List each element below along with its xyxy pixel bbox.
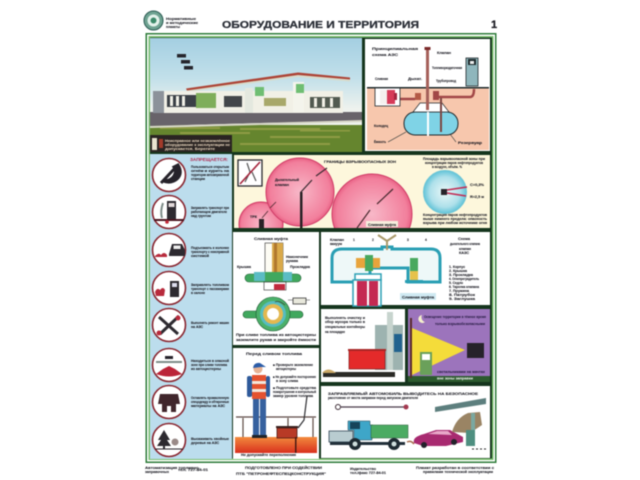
text: no explosive cargo bbox=[191, 359, 229, 371]
text: no oily clothes: Оставлять промасленную bbox=[191, 396, 229, 400]
worker heading: Перед сливом топлива bbox=[246, 351, 303, 356]
fence bbox=[236, 417, 316, 437]
zone labels: клапан bbox=[275, 183, 289, 187]
ground bbox=[367, 88, 489, 150]
valve labels: Клапан bbox=[330, 238, 344, 242]
panel: refuse container bbox=[321, 309, 405, 382]
vent pipe bbox=[426, 48, 429, 110]
text: no oily clothes: спецодежду и обтирочные bbox=[191, 400, 229, 404]
valve legend: 8. Патрубок bbox=[449, 293, 476, 297]
valve labels: 4 bbox=[425, 238, 427, 242]
text: no car washing bbox=[191, 246, 229, 258]
text: no fuel spill: над грунтом bbox=[191, 214, 212, 218]
diagram heading bbox=[372, 46, 419, 57]
tank labels: Топливораздаточная bbox=[432, 66, 462, 70]
inset heading: в воздухе, объём. % bbox=[432, 165, 462, 169]
lighting note: только взрывобезопасными bbox=[435, 322, 485, 326]
valve legend: 5. Седло bbox=[449, 281, 463, 285]
light beam bbox=[412, 328, 465, 375]
text: no oily clothes bbox=[191, 396, 229, 408]
footer left credit: Автоматизация топливно- bbox=[145, 466, 200, 470]
lighting note: Освещение территории в тёмное время bbox=[424, 315, 486, 319]
poster number: 1 bbox=[491, 19, 497, 31]
container note: на площадке bbox=[325, 330, 345, 334]
canopy bbox=[435, 398, 486, 446]
warning sign: оборудование к эксплуатации не bbox=[165, 143, 230, 147]
valve legend bbox=[449, 236, 480, 301]
canopy roof bbox=[186, 74, 350, 92]
ground bbox=[235, 437, 317, 453]
valve labels: 2 bbox=[372, 238, 374, 242]
valve labels bbox=[330, 238, 427, 246]
valve central stem bbox=[353, 255, 381, 306]
valve side stem bbox=[405, 258, 423, 283]
text: no explosive cargo: из автоцистерны bbox=[191, 367, 221, 371]
warning sign: допускается. Берегите bbox=[165, 147, 215, 151]
tank labels: Дыхат. bbox=[408, 77, 422, 81]
text: no repair: Выполнять ремонт машин bbox=[191, 321, 229, 325]
fill well bbox=[276, 396, 307, 453]
footer right credit: Издательство bbox=[350, 467, 376, 471]
coupling note bbox=[236, 333, 316, 342]
truck bbox=[329, 421, 408, 450]
lighting fixture bbox=[467, 343, 484, 358]
road bbox=[150, 112, 362, 126]
valve legend: 3. Прокладка bbox=[449, 273, 473, 277]
valve labels: вакуум bbox=[330, 242, 343, 246]
worker checklist: ■ Проверьте заземление bbox=[273, 363, 313, 367]
vehicles heading: расстояние от места заправки перед запуском двигателя bbox=[328, 396, 418, 400]
inset circle bbox=[424, 170, 485, 214]
text: no car washing: Подъезжать к колонке bbox=[191, 246, 229, 250]
tank labels: Трубопровод bbox=[436, 79, 456, 83]
tank labels bbox=[374, 51, 482, 145]
coupling top view bbox=[243, 297, 303, 331]
valve caption: Сливная муфта bbox=[402, 296, 434, 300]
footer left credit: заправочных bbox=[145, 470, 169, 474]
inset heading bbox=[423, 157, 485, 169]
header logo: плакаты bbox=[166, 25, 180, 29]
inset heading: Площадь взрывоопасной зоны при bbox=[423, 157, 485, 161]
valve legend: 6. Тарелка клапана bbox=[449, 285, 479, 289]
valve legend: 9. Заглушка bbox=[449, 297, 475, 301]
worker checklist: автоцистерны bbox=[276, 367, 296, 371]
footer right credit: тел./факс 727-84-01 bbox=[350, 471, 386, 475]
title: ОБОРУДОВАНИЕ И ТЕРРИТОРИЯ bbox=[222, 19, 419, 31]
panel: vehicles bbox=[321, 386, 490, 458]
lighting note: вне зоны заправки bbox=[437, 376, 473, 380]
text: no open fire: станции bbox=[191, 177, 205, 181]
coupling note: При сливе топлива из автоцистерны bbox=[236, 333, 316, 337]
inset note: Концентрация паров нефтепродуктов bbox=[423, 213, 487, 217]
ground strip bbox=[323, 372, 395, 377]
sports car bbox=[414, 430, 463, 448]
icon: no car washing bbox=[152, 234, 186, 266]
text: no open fire bbox=[191, 165, 230, 181]
container note: Выполнять очистку и bbox=[325, 316, 365, 320]
exhaust bbox=[407, 441, 414, 444]
icon: no oily clothes bbox=[152, 386, 186, 418]
valve legend: КАЗС bbox=[459, 251, 470, 255]
coupling heading: Сливная муфта bbox=[254, 236, 289, 241]
fuel vapour cloud bbox=[452, 412, 482, 433]
diagram heading: Принципиальная bbox=[372, 46, 419, 51]
text: no car washing: транспорту с неисправной bbox=[191, 250, 229, 254]
footer centre credit: ПТБ "ПЕТРОНЕФТЕСПЕЦКОНСТРУКЦИЯ" bbox=[236, 471, 326, 476]
zone labels: ТРК bbox=[250, 215, 257, 219]
worker checklist: ■ Не допускайте посторонних bbox=[273, 375, 316, 379]
red container bbox=[348, 349, 386, 369]
text: no trees on territory bbox=[191, 437, 229, 445]
footer right credit: правилами технической эксплуатации bbox=[423, 470, 493, 474]
zones heading: ГРАНИЦЫ ВЗРЫВООПАСНЫХ ЗОН bbox=[324, 159, 396, 164]
booth bbox=[375, 312, 403, 370]
coupling side view bbox=[245, 243, 301, 290]
panel: gas station photo bbox=[150, 38, 362, 152]
inset heading: концентрации паров нефтепродуктов bbox=[425, 161, 483, 165]
inset circle: R=2,5 м bbox=[470, 195, 485, 199]
header logo: и методические bbox=[166, 21, 198, 25]
text: no repair: на АЗС bbox=[191, 325, 204, 329]
worker checklist bbox=[273, 363, 316, 398]
zone labels: Дыхательный bbox=[275, 178, 299, 182]
footer right credit: Плакат разработан в соответствии с bbox=[416, 466, 494, 470]
distant field bbox=[150, 125, 362, 152]
tank labels: Ёмкость bbox=[374, 140, 386, 144]
text: no people near dispenser: транспорт с пассажирами bbox=[191, 287, 229, 291]
text: no explosive cargo: Находиться в опасной bbox=[191, 359, 229, 363]
icon: no trees on territory bbox=[152, 424, 186, 456]
vehicles heading bbox=[328, 391, 478, 400]
panel: prohibitions bbox=[150, 154, 232, 459]
lighting note bbox=[424, 315, 486, 380]
valve labels: 3 bbox=[407, 238, 409, 242]
text: no explosive cargo: зоне при сливе топлива bbox=[191, 363, 227, 367]
text: no people near dispenser bbox=[191, 283, 230, 295]
inset circle: С=0,3% bbox=[470, 183, 484, 187]
moon bbox=[418, 315, 425, 323]
icon: no people near dispenser bbox=[152, 272, 186, 304]
worker caption: Не допускайте переполнения bbox=[241, 453, 296, 457]
coupling note: заземлите рукав и закройте ёмкости bbox=[236, 338, 316, 342]
zone circles bbox=[238, 156, 414, 229]
distance arrow bbox=[336, 404, 408, 410]
coupling labels: Прокладка bbox=[290, 265, 310, 269]
warning sign: Неисправное или незаземлённое bbox=[165, 139, 230, 143]
inset note: взрыва при любом источнике огня bbox=[423, 221, 487, 225]
icon: no entry sign bbox=[238, 160, 262, 186]
tank labels: Клапан bbox=[437, 51, 451, 55]
inset note bbox=[423, 213, 487, 225]
fuel dispenser bbox=[466, 58, 478, 86]
text: no trees on territory: Высаживать хвойные bbox=[191, 437, 229, 441]
diagram heading: схема АЗС bbox=[372, 52, 398, 57]
valve body bbox=[332, 247, 440, 282]
fuel pipes bbox=[392, 89, 474, 99]
panel: breather valve bbox=[321, 232, 490, 306]
valve cap bbox=[378, 235, 396, 250]
footer left credit: тел. 727-84-01 bbox=[178, 468, 208, 472]
footer centre credit bbox=[236, 465, 326, 476]
panel: explosive zones bbox=[233, 154, 491, 229]
filling well bbox=[375, 88, 400, 106]
dashed vapour markers bbox=[472, 448, 486, 450]
text: no car washing: системой bbox=[191, 254, 209, 258]
text: no open fire: территории автозаправочной bbox=[191, 173, 229, 177]
underground tank bbox=[404, 112, 458, 135]
coupling labels: Крышка bbox=[237, 265, 251, 269]
valve legend: 7. Пружина bbox=[449, 289, 469, 293]
rubble bbox=[322, 370, 336, 373]
valve legend: Схема bbox=[458, 236, 471, 241]
text: no oily clothes: материалы на АЗС bbox=[191, 404, 226, 408]
text: no fuel spill: работающем двигателе bbox=[191, 210, 227, 214]
valve legend: 2. Крышка bbox=[449, 269, 467, 273]
valve legend: 4. Огнепреградитель bbox=[449, 277, 479, 281]
header logo bbox=[144, 11, 198, 30]
tank labels: Резервуар bbox=[458, 141, 482, 145]
vehicles heading: ЗАПРАВЛЯЕМЫЙ АВТОМОБИЛЬ ВЫВОДИТЕСЬ НА БЕЗОПАСНОЕ bbox=[328, 391, 478, 396]
container note bbox=[325, 316, 365, 334]
prohibitions heading: ЗАПРЕЩАЕТСЯ: bbox=[190, 157, 229, 162]
panel: fuel tank schematic bbox=[365, 39, 490, 151]
icon: no repair bbox=[152, 308, 186, 342]
coupling labels: Наконечник bbox=[286, 255, 308, 259]
icon: no explosive cargo bbox=[152, 348, 186, 382]
sign blocks bbox=[177, 54, 193, 70]
worker figure bbox=[247, 363, 270, 438]
container note: сбор мусора только в bbox=[325, 320, 365, 324]
footer centre credit: ПОДГОТОВЛЕНО ПРИ СОДЕЙСТВИИ bbox=[245, 465, 322, 470]
text: no people near dispenser: в салоне bbox=[191, 291, 205, 295]
station building bbox=[153, 82, 343, 113]
valve labels: 1 bbox=[353, 238, 355, 242]
worker checklist: замер уровня топлива bbox=[273, 394, 313, 398]
coupling labels bbox=[237, 255, 310, 305]
coupling labels: рукава bbox=[286, 259, 298, 263]
valve legend: дыхательного клапана bbox=[450, 242, 480, 246]
tank labels: Сливная bbox=[375, 77, 388, 81]
icon: no open fire bbox=[152, 158, 186, 192]
text: no fuel spill: Заправлять транспорт при bbox=[191, 206, 229, 210]
text: no repair bbox=[191, 321, 229, 329]
valve legend: 1. Корпус bbox=[449, 265, 465, 269]
panel: worker bbox=[233, 348, 319, 459]
poster frame bbox=[146, 33, 496, 463]
light pole bbox=[410, 318, 412, 378]
valve caption bbox=[400, 293, 436, 300]
zone labels bbox=[250, 178, 398, 227]
text: no open fire: Пользоваться открытым bbox=[191, 165, 230, 169]
worker checklist: в зону слива bbox=[276, 379, 298, 383]
footer right credit bbox=[350, 466, 494, 475]
container note: специальные контейнеры bbox=[325, 325, 365, 329]
zone labels: Сливная муфта bbox=[368, 223, 396, 227]
inset note: выше нижнего предела: опасность bbox=[423, 217, 487, 221]
header logo: Нормативные bbox=[166, 17, 196, 21]
text: no trees on territory: деревья на АЗС bbox=[191, 441, 220, 445]
lighting note: светильниками на мачтах bbox=[437, 370, 485, 374]
text: no open fire: огнём и курить на bbox=[191, 169, 229, 173]
worker checklist: ■ Подготовьте средства bbox=[273, 386, 316, 390]
panel: fill coupling bbox=[233, 232, 319, 345]
panel: night lighting bbox=[408, 309, 490, 382]
text: no people near dispenser: Заправлять топливом bbox=[191, 283, 230, 287]
worker checklist: пожаротушения и контрольный bbox=[273, 390, 316, 394]
warning sign bbox=[150, 135, 232, 152]
footer left credit bbox=[145, 466, 208, 474]
tank labels: Колодец bbox=[374, 124, 388, 128]
valve legend: клапан bbox=[459, 247, 471, 251]
icon: no fuel spill bbox=[152, 196, 186, 228]
dispenser bbox=[420, 352, 432, 375]
text: no fuel spill bbox=[191, 206, 229, 218]
